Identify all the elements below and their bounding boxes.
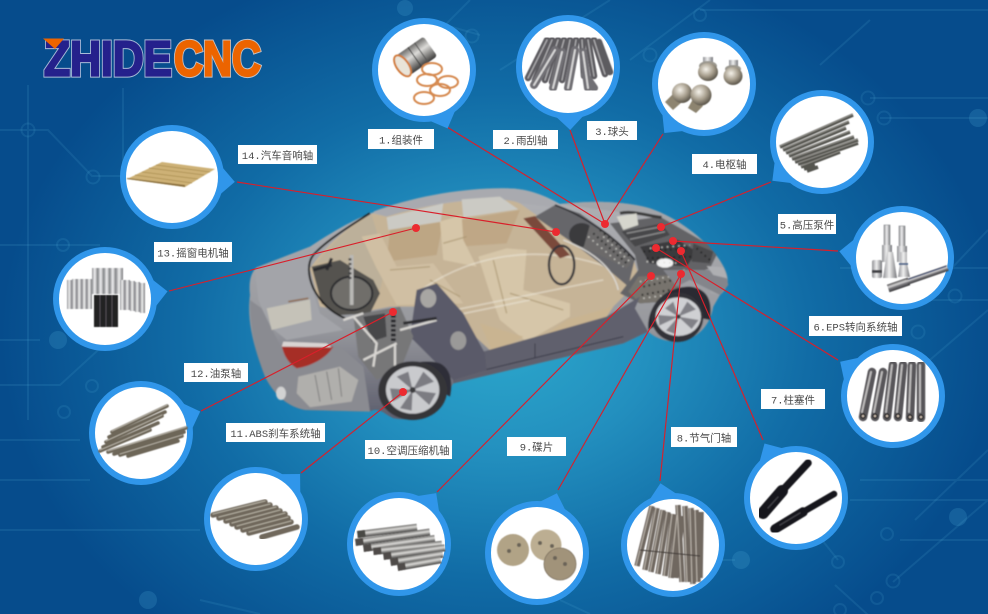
windscreen edge [555,205,635,260]
label 12: 12.油泵轴 [191,367,241,381]
roof band [373,188,563,217]
engine left bank [640,240,697,267]
rear door panel [387,222,443,262]
product 8: throttle shafts [621,479,725,597]
label 2: 2.雨刮轴 [503,134,548,148]
red marker dots [389,220,685,396]
lower engine [628,275,678,303]
label 13: 13.摇窗电机轴 [157,246,229,260]
headlight [707,266,727,278]
shock absorber spring [386,315,400,343]
label 2 [493,130,558,149]
product 1: assembly [372,18,476,136]
front side window [462,197,518,217]
label 6 [809,316,902,336]
front rim gaps [658,302,699,334]
product 9: discs [485,487,589,605]
rear side window [387,203,443,230]
product 3: ball joints [648,32,756,146]
rear door speaker [450,331,466,350]
label 3 [587,121,637,140]
label 6: 6.EPS转向系统轴 [813,320,898,334]
rear suspension [353,307,413,380]
logo: CNC [174,32,261,86]
rear fender [410,283,487,380]
trunk lid [255,248,343,340]
dashboard shell [535,205,635,287]
battery [267,299,312,330]
suspension arms [343,313,437,372]
rear strut [346,255,357,305]
muffler ribs [315,368,342,402]
rear tyre [378,361,447,420]
label 4 [692,154,757,174]
front hub [676,314,681,319]
engine speckle dark [593,230,710,295]
seat shading [390,237,563,313]
hoses [620,212,662,217]
rear rim gaps [390,372,436,411]
rear lower body [250,300,370,412]
label 13 [154,242,232,262]
steering wheel [549,246,574,284]
far front seat [440,215,477,267]
spare wheel [331,277,372,310]
hood [560,202,727,295]
label 3: 3.球头 [595,125,629,139]
rear window edge [309,213,370,318]
product 4: armature shafts [759,90,874,197]
rear wheel arch [380,362,451,397]
front rim [656,297,701,336]
label 1: 1.组装件 [379,134,423,148]
dark arm [403,318,437,323]
interior [310,199,640,353]
product 13: window motor shafts [53,247,170,351]
front bumper [663,270,728,295]
product 12: oil pump shafts [89,381,207,485]
label 11: 11.ABS刹车系统轴 [230,427,321,441]
label 1 [368,129,434,149]
label 5: 5.高压泵件 [780,218,834,232]
label 7 [761,389,825,409]
rear hub [410,387,416,393]
engine right bank [692,243,713,263]
label 14: 14.汽车音响轴 [242,149,313,163]
door armrest [420,289,436,308]
product 7: plunger parts [744,433,848,550]
engine speckle light [588,237,710,298]
front tyre in bay [569,223,594,247]
taillight [282,345,333,368]
rear parcel shelf [317,215,387,290]
exhaust tip [276,387,286,400]
dashboard wood [523,216,570,258]
rear wheel well [312,260,380,315]
taillight upper [282,342,332,347]
muffler [297,367,358,407]
product 6: EPS steering shafts [829,344,945,448]
label 12 [184,363,248,382]
rear seat [362,233,463,305]
product 5: high pressure pump parts [837,206,954,310]
dash trim curve [563,240,618,290]
floor carpet [480,307,613,353]
front tyre [651,293,703,342]
label 5 [778,214,836,234]
label 14 [238,145,317,164]
logo: CNC [174,32,261,86]
label 9: 9.碟片 [520,440,553,454]
suspension dark parts [363,313,387,342]
front door panel [460,210,520,247]
bay mechanics [583,225,633,268]
rear rim [386,366,439,414]
coolant reservoir [617,213,638,230]
car cutaway illustration [249,188,728,420]
glass shell curves [417,254,607,315]
engine cover [657,258,673,268]
rear strut coil [345,258,354,280]
label 10 [365,440,452,459]
label 9 [507,437,566,456]
product 2: wiper shafts [516,15,620,131]
label 8 [671,427,737,447]
label 10: 10.空调压缩机轴 [368,444,449,458]
trunk brackets [313,258,332,270]
logo: ZHIDE [44,32,172,86]
near front seat [478,248,570,342]
leader lines [169,127,838,492]
label 11 [226,423,325,442]
logo [43,32,261,86]
product 11: ABS brake shafts [204,459,315,571]
product 10: AC compressor shafts [347,481,453,596]
label 7: 7.柱塞件 [771,394,815,408]
label 8: 8.节气门轴 [677,432,731,446]
intake manifold [622,223,670,247]
door seam [457,337,623,377]
lower door [450,297,648,383]
product 14: car audio shafts [120,125,236,229]
car body silhouette [249,188,728,419]
label 4: 4.电枢轴 [702,158,747,172]
labels [154,121,902,459]
intake ribs [627,227,665,239]
front wheel arch [648,287,711,330]
battery terminals [288,298,308,302]
engine bay [610,217,717,303]
logo: ZHIDE [44,32,172,86]
